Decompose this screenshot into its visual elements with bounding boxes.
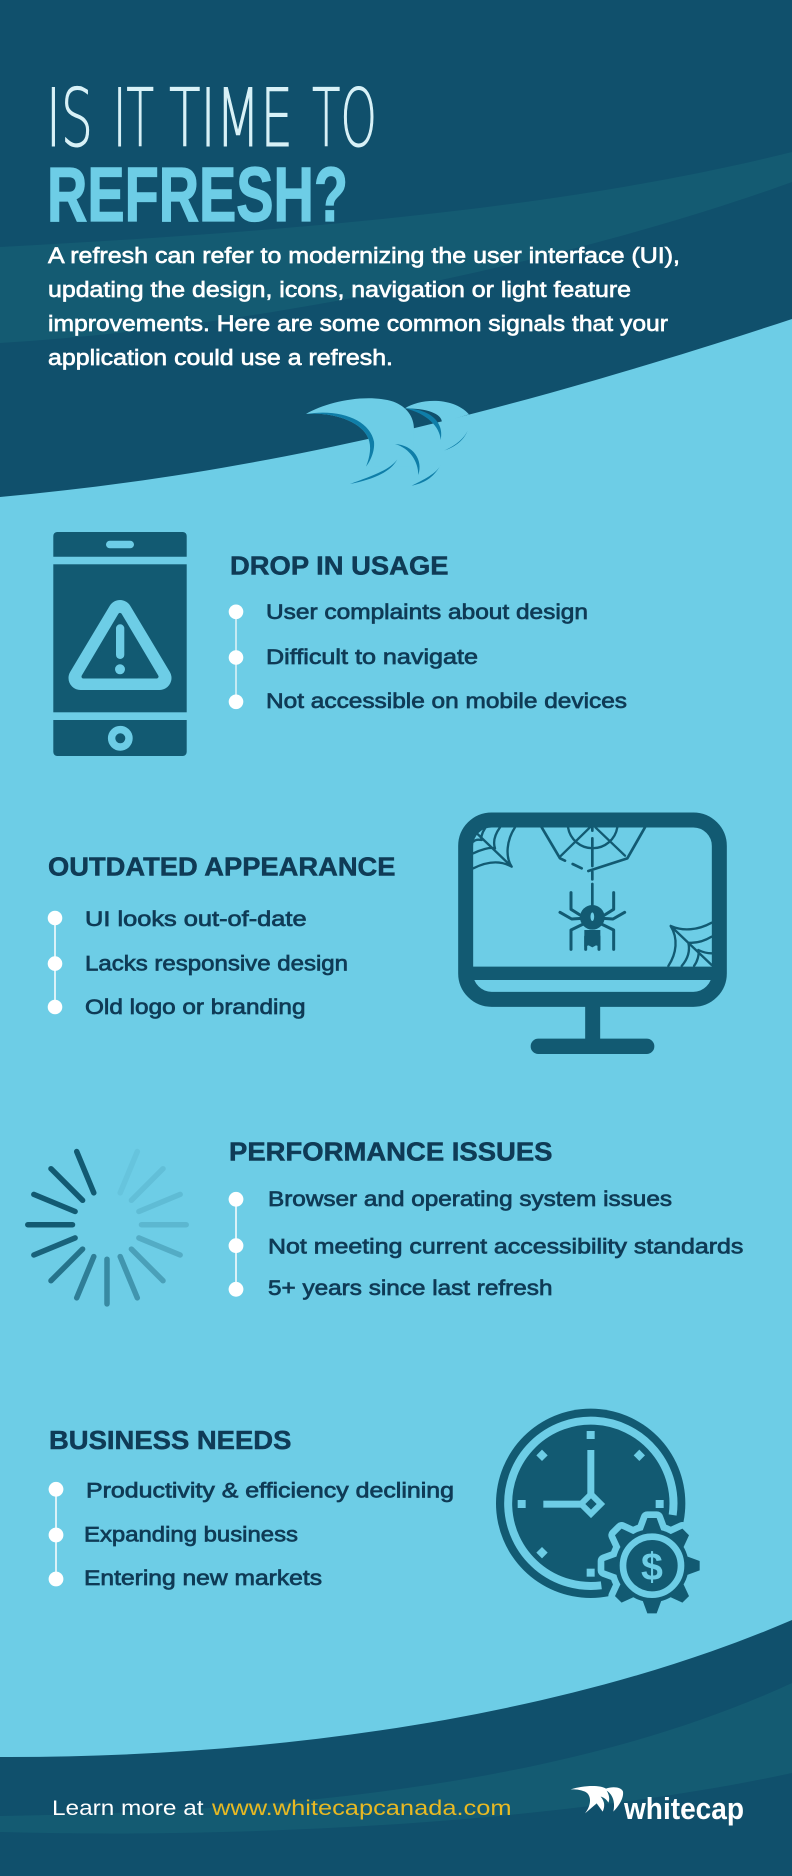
footer lighter band bbox=[0, 1683, 792, 1833]
list: outdated appearance: Lacks responsive design bbox=[85, 953, 348, 976]
intro paragraph: updating the design, icons, navigation or light feature bbox=[48, 277, 631, 302]
heading: outdated appearance: OUTDATED APPEARANCE bbox=[48, 851, 396, 881]
heading: business needs: BUSINESS NEEDS bbox=[49, 1425, 291, 1455]
title line 1: TIME bbox=[169, 72, 293, 165]
list: outdated appearance: UI looks out-of-date bbox=[85, 908, 307, 931]
list: performance issues: Not meeting current accessibility standards bbox=[268, 1235, 743, 1258]
list: performance issues: 5+ years since last refresh bbox=[268, 1277, 552, 1300]
list: performance issues bbox=[229, 1188, 743, 1300]
footer logo bbox=[571, 1786, 744, 1826]
icon: clock with dollar gear bbox=[496, 1409, 700, 1613]
list: drop in usage: User complaints about design bbox=[266, 601, 588, 624]
header wave dark bbox=[0, 0, 792, 497]
icon: monitor with spider and webs bbox=[466, 820, 719, 1046]
footer text: Learn more at bbox=[52, 1797, 204, 1820]
list: business needs: Productivity & efficiency declining bbox=[86, 1480, 454, 1503]
list: business needs: Entering new markets bbox=[84, 1567, 322, 1590]
heading: drop in usage: DROP IN USAGE bbox=[230, 550, 448, 580]
footer wave dark bbox=[0, 1620, 792, 1876]
title line 1: TO bbox=[312, 72, 377, 165]
list: business needs: Expanding business bbox=[84, 1524, 298, 1547]
intro paragraph: application could use a refresh. bbox=[48, 345, 393, 370]
title line 1: IS bbox=[46, 72, 93, 165]
intro paragraph: improvements. Here are some common signals that your bbox=[48, 311, 668, 336]
list: outdated appearance: Old logo or branding bbox=[85, 996, 306, 1019]
icon: clock with dollar gear: $ bbox=[641, 1545, 663, 1589]
title line 1: IT bbox=[113, 72, 154, 165]
list: drop in usage bbox=[229, 601, 627, 713]
icon: wave logo mark bbox=[306, 398, 469, 486]
title line 1 bbox=[46, 72, 377, 165]
header lighter band bbox=[0, 152, 792, 343]
list: drop in usage: Difficult to navigate bbox=[266, 646, 478, 669]
list: business needs bbox=[49, 1480, 454, 1590]
icon: loading spinner bbox=[28, 1152, 186, 1304]
heading: performance issues: PERFORMANCE ISSUES bbox=[229, 1137, 552, 1167]
footer text bbox=[52, 1797, 512, 1820]
icon: phone with warning bbox=[53, 532, 187, 756]
list: outdated appearance bbox=[48, 908, 348, 1019]
list: drop in usage: Not accessible on mobile devices bbox=[266, 690, 627, 713]
list: performance issues: Browser and operating system issues bbox=[268, 1188, 672, 1211]
footer text: www.whitecapcanada.com bbox=[211, 1797, 512, 1820]
footer logo: whitecap bbox=[623, 1791, 744, 1826]
intro paragraph bbox=[48, 243, 680, 370]
title line 2: REFRESH? bbox=[47, 152, 348, 238]
intro paragraph: A refresh can refer to modernizing the user interface (UI), bbox=[48, 243, 680, 268]
